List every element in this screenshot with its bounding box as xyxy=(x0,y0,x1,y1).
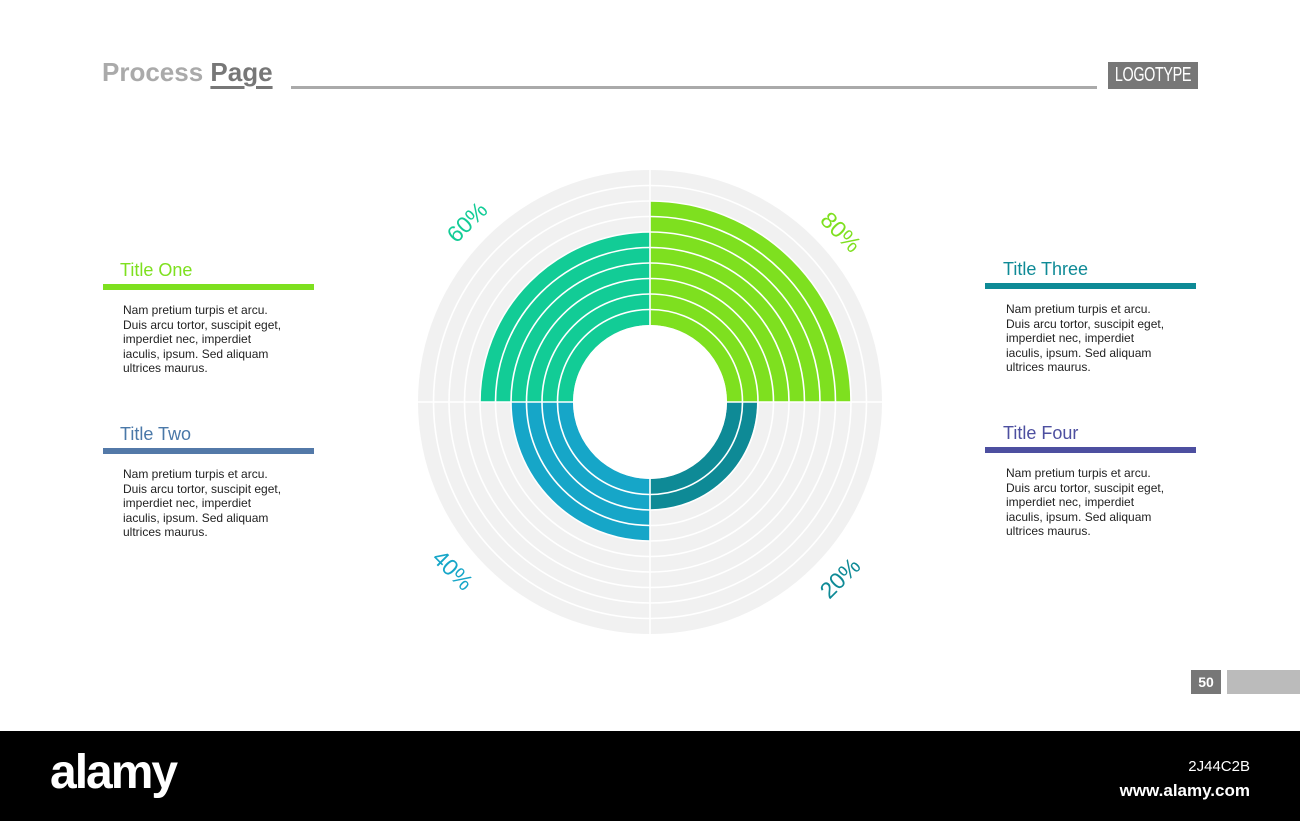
panel: title three: imperdiet nec, imperdiet xyxy=(1006,331,1134,345)
footer bar: alamy xyxy=(50,746,176,799)
panel: title two: iaculis, ipsum. Sed aliquam xyxy=(123,510,268,524)
page number xyxy=(1191,670,1221,694)
header title: Process Page xyxy=(102,57,273,87)
panel: title four xyxy=(985,423,1196,538)
page number: 50 xyxy=(1198,674,1214,690)
label 60%: 60% xyxy=(442,197,492,247)
panel: title two: Title Two xyxy=(120,424,191,444)
panel: title four: Title Four xyxy=(1003,423,1078,443)
footer bar: www.alamy.com xyxy=(1120,781,1250,800)
panel: title three: iaculis, ipsum. Sed aliquam xyxy=(1006,346,1151,360)
panel: title one: iaculis, ipsum. Sed aliquam xyxy=(123,346,268,360)
footer bar xyxy=(0,731,1300,821)
panel: title three xyxy=(985,259,1196,374)
panel: title two: Duis arcu tortor, suscipit eget, xyxy=(123,482,281,496)
panel: title three: ultrices maurus. xyxy=(1006,360,1091,374)
logotype: LOGOTYPE xyxy=(1115,64,1191,86)
panel: title one xyxy=(103,260,314,375)
panel: title two xyxy=(103,424,314,539)
panel: title three: Duis arcu tortor, suscipit eget, xyxy=(1006,316,1164,330)
label 20%: 20% xyxy=(815,553,865,603)
panel: title one: imperdiet nec, imperdiet xyxy=(123,332,251,346)
panel: title two: Nam pretium turpis et arcu. xyxy=(123,467,268,481)
panel: title four: Duis arcu tortor, suscipit eget, xyxy=(1006,480,1164,494)
panel: title four: imperdiet nec, imperdiet xyxy=(1006,495,1134,509)
panel: title two: ultrices maurus. xyxy=(123,525,208,539)
logotype xyxy=(1108,62,1198,89)
panel: title three: Title Three xyxy=(1003,259,1088,279)
footer bar: 2J44C2B xyxy=(1188,758,1250,775)
panel: title four: ultrices maurus. xyxy=(1006,524,1091,538)
label 80%: 80% xyxy=(816,207,866,257)
panel: title four: Nam pretium turpis et arcu. xyxy=(1006,466,1151,480)
panel: title three: Nam pretium turpis et arcu. xyxy=(1006,302,1151,316)
panel: title four: iaculis, ipsum. Sed aliquam xyxy=(1006,510,1151,524)
panel: title one: Title One xyxy=(120,260,192,280)
panel: title one: Duis arcu tortor, suscipit eget, xyxy=(123,318,281,332)
panel: title one: ultrices maurus. xyxy=(123,361,208,375)
panel: title one: Nam pretium turpis et arcu. xyxy=(123,303,268,317)
label 40%: 40% xyxy=(428,545,478,595)
panel: title two: imperdiet nec, imperdiet xyxy=(123,496,251,510)
